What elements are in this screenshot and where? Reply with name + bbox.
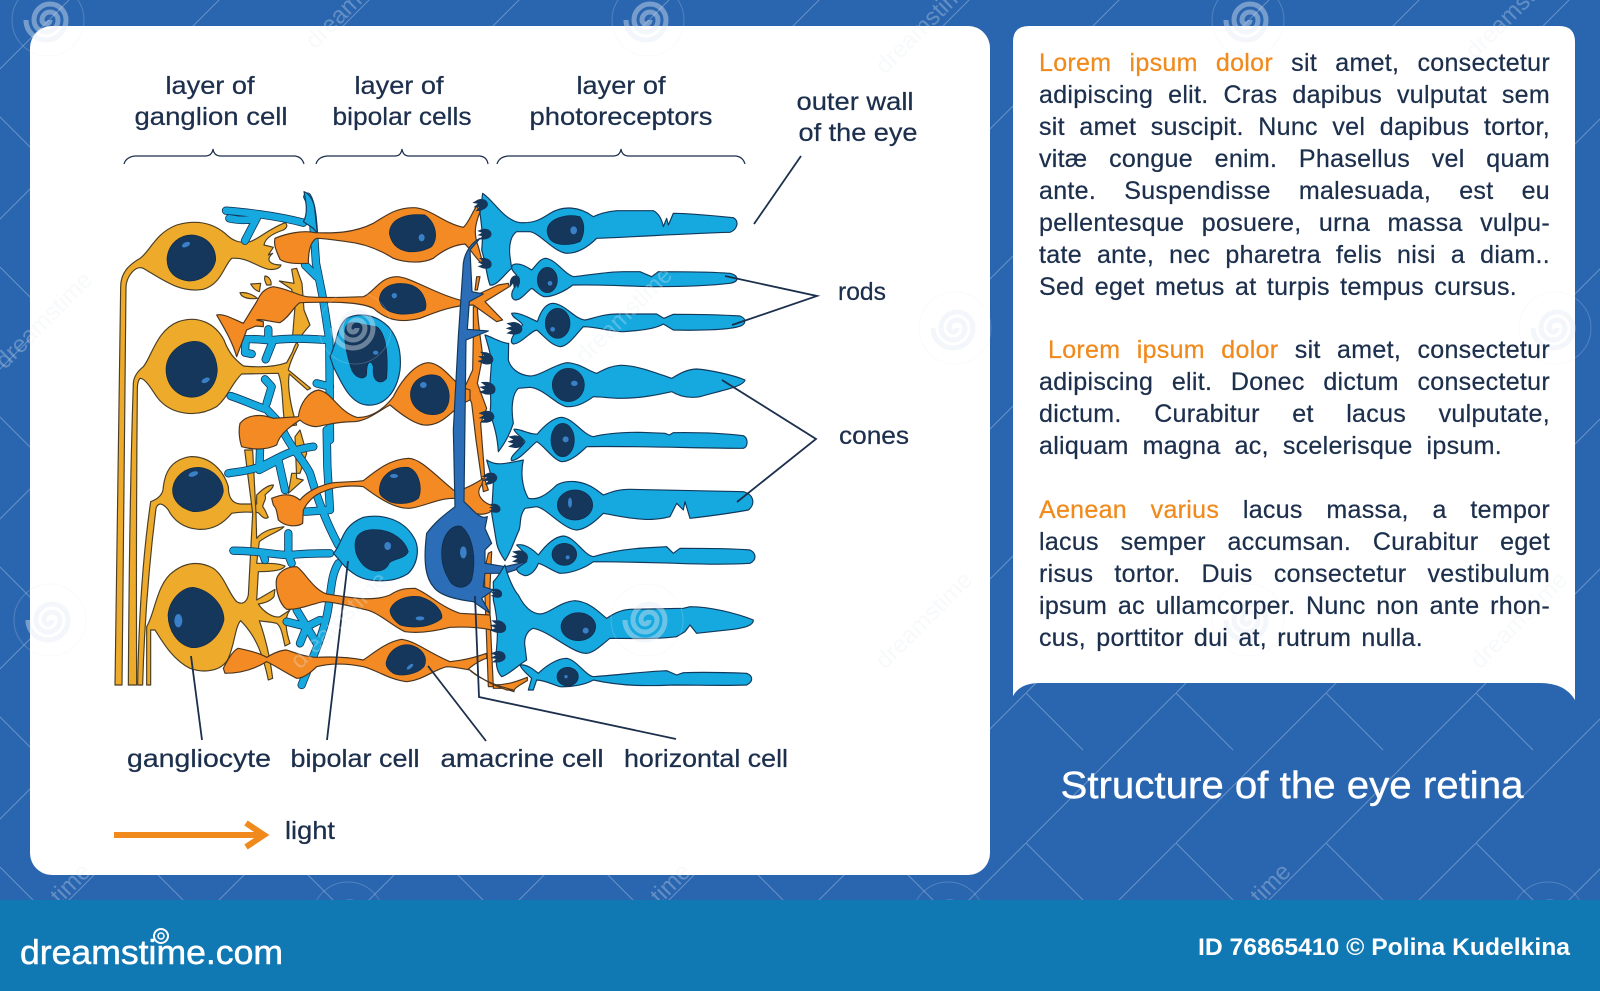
panel: diagram card [30, 26, 990, 875]
text: time [1245, 858, 1296, 909]
retina cell diagram [115, 192, 755, 692]
text block: paragraph 2: Lorem ipsum dolor sit amet, consectetur [1048, 336, 1550, 364]
text block: paragraph 3: ipsum ac ullamcorper. Nunc non ante rhon- [1039, 592, 1550, 620]
ganglion cells [115, 222, 311, 685]
text block: paragraph 2 [1039, 336, 1550, 460]
rod 2 [511, 303, 745, 347]
amacrine cell [425, 238, 527, 613]
footer logo: dreamstime.com: dreamstime.com [20, 934, 283, 972]
text: time [645, 858, 696, 909]
label: outer wall of the eye: outer wall [796, 88, 914, 116]
text block: paragraph 1: Sed eget metus at turpis tempus cursus. [1039, 273, 1517, 301]
layer headings: layer of [354, 72, 444, 100]
bipolar and dendrite network [226, 192, 417, 685]
cone 2 [485, 335, 745, 452]
label: amacrine cell [428, 666, 604, 773]
label: bipolar cell: bipolar cell [290, 745, 420, 773]
text block: paragraph 2: adipiscing elit. Donec dictum consectetur [1039, 368, 1550, 396]
title: Structure of the eye retina [1060, 765, 1524, 807]
label: amacrine cell: amacrine cell [440, 745, 604, 773]
label: gangliocyte: gangliocyte [127, 745, 271, 773]
cone 1 [480, 193, 737, 285]
rod 4 [517, 536, 755, 576]
text block: paragraph 1: vitæ congue enim. Phasellus vel quam [1039, 145, 1550, 173]
layer headings [134, 72, 712, 131]
text block: paragraph 1: sit amet suscipit. Nunc vel dapibus tortor, [1039, 113, 1550, 141]
text: dreamstime [285, 566, 393, 674]
label: bipolar cell [290, 561, 420, 773]
text block: paragraph 1: tate ante, nec pharetra felis nisi a diam.. [1039, 241, 1550, 269]
text: dreamstime [570, 261, 678, 369]
label: outer wall of the eye: of the eye [798, 119, 918, 147]
footer credit: ID 76865410 © Polina Kudelkina [1198, 934, 1571, 961]
footer bar [0, 900, 1600, 991]
label: cones: cones [839, 422, 909, 450]
text block: paragraph 3: risus tortor. Duis consectetur vestibulum [1039, 560, 1550, 588]
text block: paragraph 3: Aenean varius lacus massa, a tempor [1039, 496, 1550, 524]
text: dreamstime [1465, 566, 1573, 674]
orange bipolar cells [217, 206, 513, 690]
rod 1 [512, 258, 737, 300]
label: horizontal cell [475, 596, 788, 773]
text block: paragraph 2: aliquam magna ac, scelerisque ipsum. [1039, 432, 1502, 460]
label: light: light [285, 817, 335, 845]
label: gangliocyte [127, 656, 271, 773]
text block: paragraph 1: ante. Suspendisse malesuada, est eu [1039, 177, 1550, 205]
text block: paragraph 1: Lorem ipsum dolor sit amet, consectetur [1039, 49, 1550, 77]
cone 3 [487, 460, 753, 561]
text: time [45, 858, 96, 909]
layer headings: photoreceptors [530, 103, 712, 131]
label: horizontal cell: horizontal cell [624, 745, 788, 773]
rod 3 [511, 417, 747, 462]
layer headings: layer of [166, 72, 255, 100]
label: cones [722, 380, 909, 502]
label: rods [725, 276, 886, 325]
photoreceptors [471, 193, 755, 690]
layer headings: ganglion cell [134, 103, 288, 131]
cone 4 [493, 565, 753, 677]
text block: paragraph 1: pellentesque posuere, urna massa vulpu- [1039, 209, 1550, 237]
arrow: light direction [114, 823, 264, 847]
text block: paragraph 1 [1039, 49, 1550, 301]
label: rods: rods [838, 278, 886, 306]
layer headings: layer of [576, 72, 666, 100]
panel: text card [1013, 26, 1575, 700]
text block: paragraph 1: adipiscing elit. Cras dapibus vulputat sem [1039, 81, 1550, 109]
text block: paragraph 2: dictum. Curabitur et lacus vulputate, [1039, 400, 1550, 428]
text block: paragraph 3: cus, porttitor dui at, rutrum nulla. [1039, 624, 1423, 652]
text block: paragraph 3: lacus semper accumsan. Curabitur eget [1039, 528, 1550, 556]
rod 5 [520, 658, 752, 690]
horizontal cell processes [465, 277, 527, 692]
text block: paragraph 3 [1038, 496, 1550, 652]
label: outer wall of the eye [754, 88, 918, 224]
layer braces [124, 149, 745, 164]
synapses [471, 197, 528, 664]
layer headings: bipolar cells [332, 103, 472, 131]
text: dreamstime [870, 566, 978, 674]
